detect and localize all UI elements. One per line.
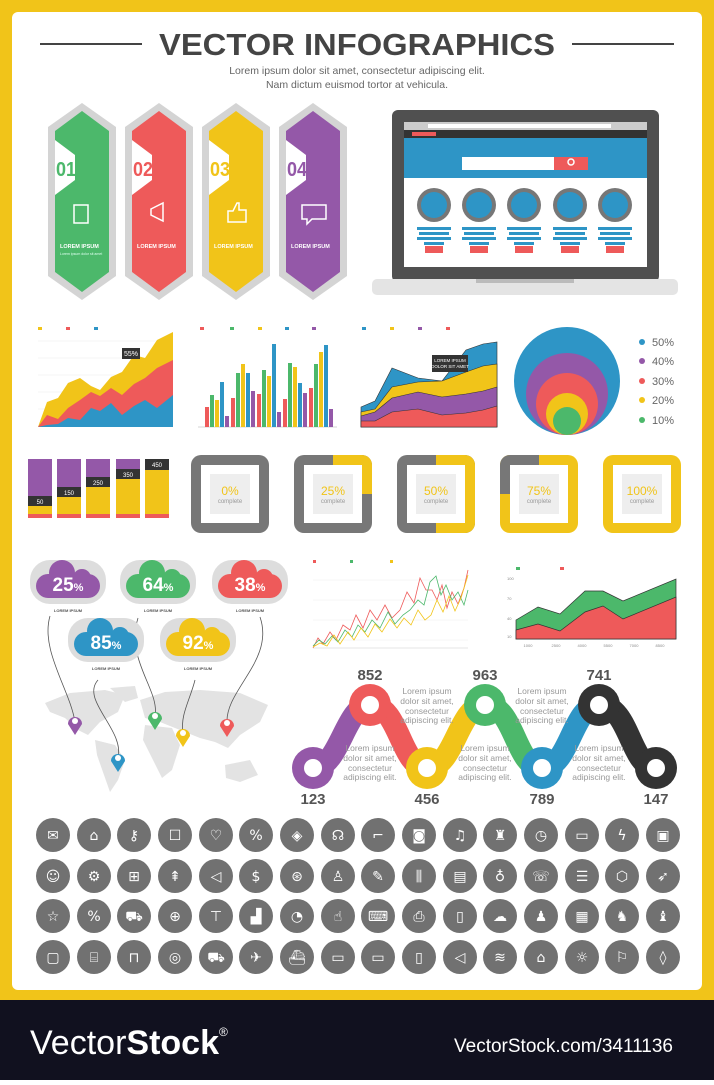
legend: circles: 30% bbox=[652, 376, 674, 388]
icon glyphs: ⚷ bbox=[129, 828, 139, 844]
snake timeline: adipiscing elit. bbox=[458, 772, 512, 782]
icon glyphs: ▭ bbox=[371, 950, 385, 966]
legend: circles: 10% bbox=[652, 415, 674, 427]
icon glyphs: ☁ bbox=[493, 909, 507, 925]
step 02: 02 bbox=[133, 159, 153, 181]
icon glyphs: % bbox=[249, 828, 263, 844]
clouds: 85% bbox=[91, 633, 122, 654]
snake timeline: 456 bbox=[414, 791, 440, 808]
chart: area chart 2: 4000 bbox=[578, 643, 587, 648]
snake timeline: consectetur bbox=[463, 763, 507, 773]
legend: circles: 50% bbox=[652, 337, 674, 349]
icon glyphs: ⚙ bbox=[88, 869, 100, 885]
clouds: 92% bbox=[183, 633, 214, 654]
snake timeline: Lorem ipsum bbox=[517, 686, 567, 696]
icon glyphs: ◔ bbox=[291, 909, 303, 925]
icon glyphs: ▦ bbox=[575, 909, 589, 925]
icon glyphs: ✈ bbox=[250, 950, 262, 966]
snake timeline: Lorem ipsum bbox=[460, 743, 510, 753]
icon glyphs: ☊ bbox=[332, 828, 344, 844]
snake timeline: 123 bbox=[300, 791, 326, 808]
icon glyphs: ♜ bbox=[494, 828, 506, 844]
chart: area chart 2: 70 bbox=[507, 596, 512, 601]
snake timeline: Lorem ipsum bbox=[345, 743, 395, 753]
panel: hexagon steps bbox=[48, 103, 347, 300]
icon glyphs: ▭ bbox=[331, 950, 345, 966]
chart: stacked bars: 50 bbox=[37, 500, 44, 506]
icon glyphs: ◎ bbox=[169, 950, 181, 966]
step 03: 03 bbox=[210, 159, 230, 181]
icon glyphs: ▤ bbox=[453, 869, 467, 885]
icon glyphs: ▟ bbox=[250, 907, 262, 925]
chart: stacked bars: 350 bbox=[123, 473, 134, 479]
icon glyphs: ⫼ bbox=[416, 869, 422, 885]
progress squares: complete bbox=[630, 499, 655, 505]
progress squares: complete bbox=[424, 499, 449, 505]
icon glyphs: ♝ bbox=[657, 909, 669, 925]
icon glyphs: ◙ bbox=[412, 828, 426, 844]
icon glyphs: ☺ bbox=[46, 869, 60, 885]
title: VECTOR INFOGRAPHICS bbox=[159, 27, 555, 62]
clouds bbox=[30, 560, 288, 671]
icon grid bbox=[36, 818, 680, 974]
icon glyphs: ▢ bbox=[46, 950, 60, 966]
icon glyphs: ≋ bbox=[494, 950, 506, 966]
chart: stacked area 2: LOREM IPSUM bbox=[434, 358, 466, 363]
icon glyphs: ⌨ bbox=[368, 909, 388, 925]
snake timeline: consectetur bbox=[405, 706, 449, 716]
snake timeline bbox=[292, 667, 677, 808]
icon glyphs: ◁ bbox=[455, 950, 466, 966]
footer band: VectorStock.com/3411136 bbox=[454, 1036, 673, 1057]
clouds: LOREM IPSUM bbox=[236, 608, 265, 613]
snake timeline: adipiscing elit. bbox=[572, 772, 626, 782]
chart: stacked bars: 250 bbox=[93, 481, 104, 487]
icon glyphs: ♁ bbox=[495, 869, 505, 885]
chart: stacked bars: 450 bbox=[152, 463, 163, 469]
step 01: 01 bbox=[56, 159, 76, 181]
step 02: LOREM IPSUM bbox=[137, 244, 176, 250]
icon glyphs: ⊓ bbox=[129, 950, 139, 966]
chart: area chart 2: 1000 bbox=[524, 643, 533, 648]
map pins bbox=[68, 712, 234, 772]
icon glyphs: ▯ bbox=[415, 950, 423, 966]
snake timeline: consectetur bbox=[577, 763, 621, 773]
connectors bbox=[48, 616, 263, 758]
chart: area chart 2: 100 bbox=[507, 576, 514, 581]
icon glyphs: ▯ bbox=[456, 909, 464, 925]
icon glyphs: ▣ bbox=[656, 828, 670, 844]
snake timeline: dolor sit amet, bbox=[343, 753, 397, 763]
progress squares: 75% bbox=[527, 484, 551, 498]
icon glyphs: ⌂ bbox=[537, 950, 545, 966]
icon glyphs: ⛟ bbox=[207, 950, 225, 966]
snake timeline: 789 bbox=[529, 791, 555, 808]
subtitle: Lorem ipsum dolor sit amet, consectetur adipiscing elit. bbox=[229, 65, 485, 77]
icon glyphs: ⌸ bbox=[90, 950, 98, 966]
icon glyphs: ◷ bbox=[535, 828, 547, 844]
chart: stacked area 2: DOLOR SIT AMET bbox=[431, 364, 469, 369]
icon glyphs: ⛟ bbox=[125, 909, 143, 925]
snake timeline: Lorem ipsum bbox=[574, 743, 624, 753]
icon glyphs: ◊ bbox=[660, 950, 667, 966]
chart: stacked area 1: 55% bbox=[124, 351, 138, 358]
subtitle: Nam dictum euismod tortor at vehicula. bbox=[266, 79, 448, 91]
chart: stacked area 2 bbox=[361, 327, 497, 427]
legend: circles: 40% bbox=[652, 356, 674, 368]
snake timeline: consectetur bbox=[520, 706, 564, 716]
chart: area chart 2: 40 bbox=[507, 616, 512, 621]
icon glyphs: ✉ bbox=[47, 828, 59, 844]
chart: area chart 2: 10 bbox=[507, 634, 512, 639]
clouds: LOREM IPSUM bbox=[144, 608, 173, 613]
progress squares: complete bbox=[218, 499, 243, 505]
snake timeline: consectetur bbox=[348, 763, 392, 773]
legend: circles bbox=[639, 337, 674, 427]
step 02 bbox=[125, 103, 193, 300]
chart: stacked area 1 bbox=[38, 327, 173, 427]
icon glyphs: ▭ bbox=[575, 828, 589, 844]
chart: area chart 2: 8500 bbox=[656, 643, 665, 648]
icon glyphs: ⊞ bbox=[128, 869, 140, 885]
snake timeline: 741 bbox=[586, 667, 612, 684]
snake timeline: adipiscing elit. bbox=[343, 772, 397, 782]
icon glyphs: ☰ bbox=[576, 869, 588, 885]
chart: area chart 2: 7000 bbox=[630, 643, 639, 648]
footer band bbox=[0, 1000, 714, 1080]
icon glyphs: % bbox=[87, 909, 101, 925]
subtitle bbox=[229, 65, 485, 91]
snake timeline: 852 bbox=[357, 667, 383, 684]
chart: bar chart bbox=[198, 327, 337, 427]
icon glyphs: ⬡ bbox=[616, 869, 628, 885]
clouds: 25% bbox=[53, 575, 84, 596]
icon glyphs: ☏ bbox=[532, 869, 550, 885]
step 03: LOREM IPSUM bbox=[214, 244, 253, 250]
chart: area chart 2: 5500 bbox=[604, 643, 613, 648]
world map bbox=[45, 686, 268, 792]
progress squares: 25% bbox=[321, 484, 345, 498]
step 04: LOREM IPSUM bbox=[291, 244, 330, 250]
progress squares: complete bbox=[527, 499, 552, 505]
clouds: 64% bbox=[143, 575, 174, 596]
legend: circles: 20% bbox=[652, 395, 674, 407]
icon glyphs: ☼ bbox=[576, 950, 588, 966]
clouds: LOREM IPSUM bbox=[92, 666, 121, 671]
chart: area chart 2: 2500 bbox=[552, 643, 561, 648]
snake timeline: dolor sit amet, bbox=[458, 753, 512, 763]
clouds: LOREM IPSUM bbox=[54, 608, 83, 613]
icon glyphs bbox=[46, 828, 670, 966]
snake timeline: 963 bbox=[472, 667, 498, 684]
icon glyphs: ⛴ bbox=[288, 950, 306, 966]
icon glyphs: ⇞ bbox=[169, 869, 181, 885]
icon glyphs: ➶ bbox=[657, 869, 669, 885]
chart: area chart 2 bbox=[507, 567, 676, 648]
icon glyphs: ⊕ bbox=[169, 909, 181, 925]
icon glyphs: ♟ bbox=[535, 909, 547, 925]
progress squares: 50% bbox=[424, 484, 448, 498]
icon glyphs: ⌂ bbox=[90, 828, 98, 844]
step 04: 04 bbox=[287, 159, 308, 181]
step 01: LOREM IPSUM bbox=[60, 244, 99, 250]
snake timeline: adipiscing elit. bbox=[400, 715, 454, 725]
step 03 bbox=[202, 103, 270, 300]
footer band: VectorStock bbox=[30, 1024, 219, 1062]
icon glyphs: ✎ bbox=[372, 869, 384, 885]
snake timeline: dolor sit amet, bbox=[400, 696, 454, 706]
snake timeline: Lorem ipsum bbox=[402, 686, 452, 696]
progress squares: complete bbox=[321, 499, 346, 505]
icon glyphs: ⊛ bbox=[291, 869, 303, 885]
icon glyphs: ⌐ bbox=[372, 828, 384, 844]
footer band: ® bbox=[219, 1025, 228, 1039]
icon glyphs: ☐ bbox=[169, 828, 181, 844]
progress squares bbox=[191, 455, 681, 533]
icon glyphs: ☝ bbox=[334, 909, 342, 925]
progress squares: 100% bbox=[627, 484, 658, 498]
icon glyphs: ⚐ bbox=[616, 950, 628, 966]
icon glyphs: ◁ bbox=[211, 869, 222, 885]
clouds: 38% bbox=[235, 575, 266, 596]
icon glyphs: ♡ bbox=[210, 828, 222, 844]
snake timeline: dolor sit amet, bbox=[515, 696, 569, 706]
icon glyphs: ⎙ bbox=[413, 909, 425, 925]
clouds: LOREM IPSUM bbox=[184, 666, 213, 671]
icon glyphs: ⊤ bbox=[210, 909, 222, 925]
icon glyphs: ☆ bbox=[47, 909, 59, 925]
laptop bbox=[372, 110, 678, 295]
chart: concentric circles bbox=[514, 327, 620, 435]
icon glyphs: ♞ bbox=[616, 909, 628, 925]
chart: stacked bars bbox=[28, 459, 169, 518]
chart: stacked bars: 150 bbox=[64, 491, 75, 497]
snake timeline: dolor sit amet, bbox=[572, 753, 626, 763]
progress squares: 0% bbox=[221, 484, 239, 498]
step 01 bbox=[48, 103, 116, 300]
icon glyphs: ϟ bbox=[617, 828, 627, 844]
icon glyphs: ♫ bbox=[454, 828, 466, 844]
snake timeline: 147 bbox=[643, 791, 669, 808]
icon glyphs: $ bbox=[252, 869, 260, 885]
step 04 bbox=[279, 103, 347, 300]
snake timeline: adipiscing elit. bbox=[515, 715, 569, 725]
icon glyphs: ♙ bbox=[332, 869, 344, 885]
chart: line chart bbox=[313, 560, 468, 648]
step 01: Lorem ipsum dolor sit amet bbox=[60, 252, 102, 256]
icon glyphs: ◈ bbox=[292, 828, 303, 844]
